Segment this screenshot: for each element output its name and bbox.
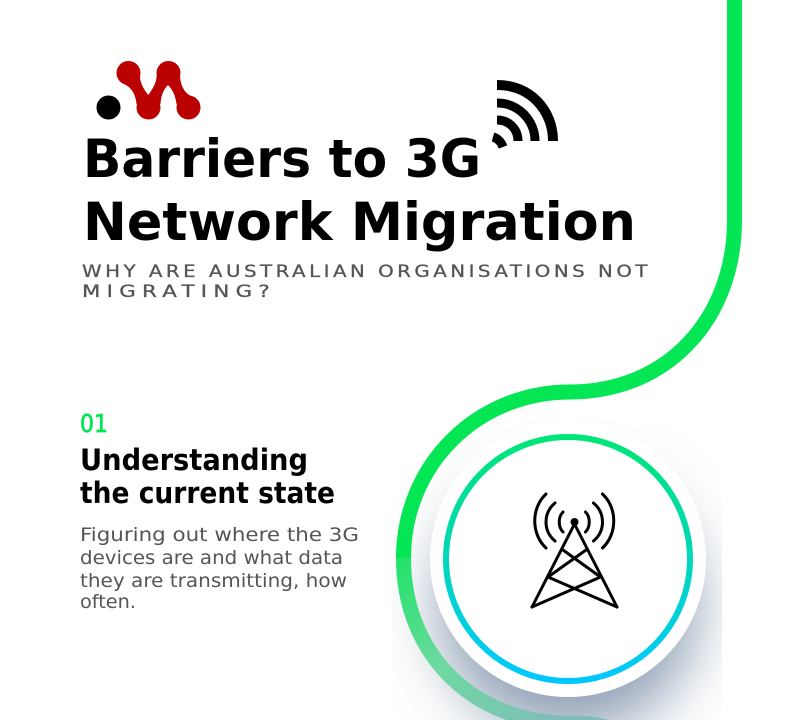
section heading [80,443,335,510]
subtitle: MIGRATING? [82,282,276,302]
section body: Figuring out where the 3G [80,524,359,546]
logo [96,61,200,120]
section heading: the current state [80,476,335,510]
subtitle [82,262,651,302]
section heading: Understanding [80,443,308,477]
subtitle: WHY ARE AUSTRALIAN ORGANISATIONS NOT [82,262,651,282]
icon: radio tower [532,494,617,607]
faded curved line lower [404,558,612,720]
title: Barriers to 3G [83,129,481,190]
circle badge [430,421,706,697]
green curved line upper [404,0,734,558]
icon: wifi signal [493,85,553,147]
section body: devices are and what data [80,547,343,569]
section body [80,524,359,613]
section body: often. [80,591,136,613]
title: Network Migration [83,192,636,253]
circle drop shadow [438,474,698,720]
title [83,129,636,253]
section number: 01 [80,409,108,438]
section body: they are transmitting, how [80,570,347,592]
